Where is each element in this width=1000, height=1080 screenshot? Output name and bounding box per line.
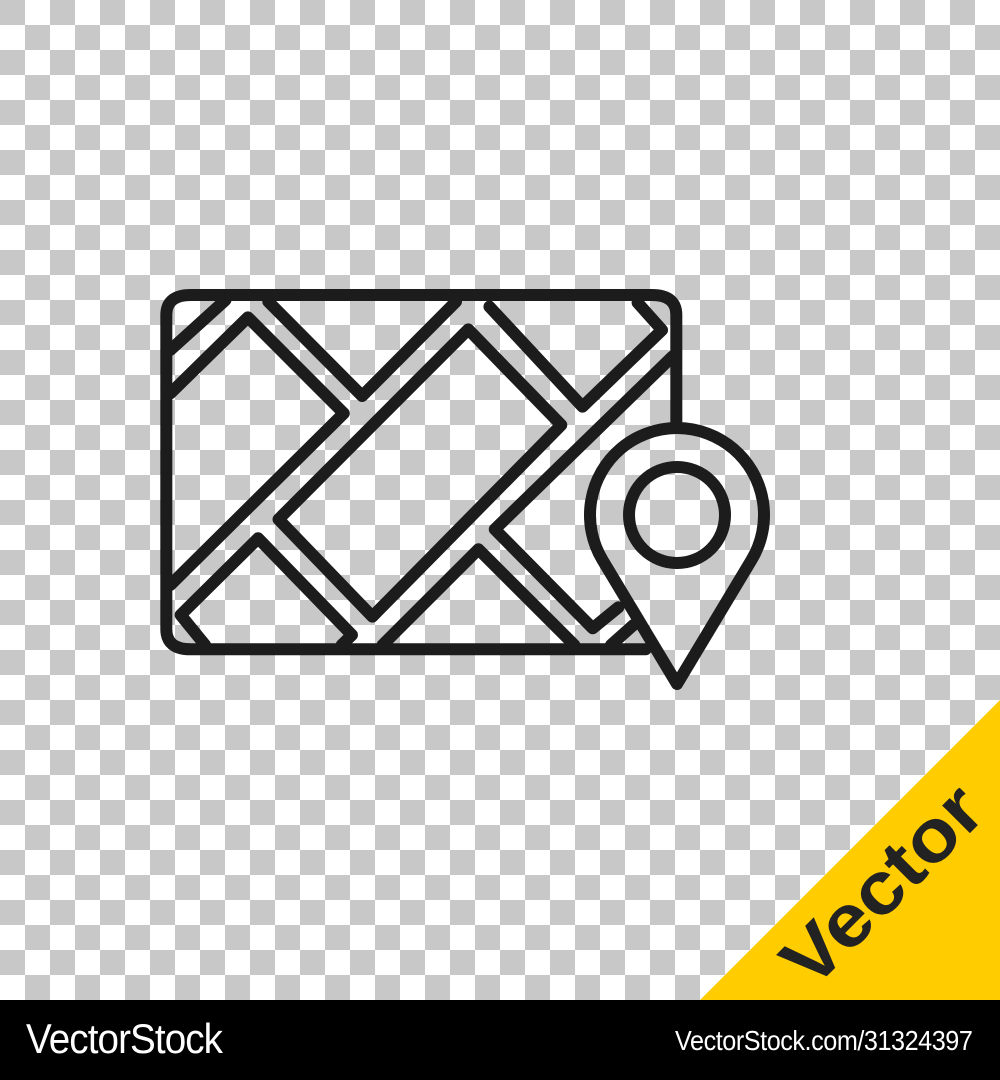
footer logo text: VectorStock — [26, 1015, 222, 1062]
map grid — [166, 295, 676, 649]
footer bar — [0, 1000, 1000, 1080]
icon: folded map with location pin — [166, 295, 764, 684]
footer url: VectorStock.com/31324397 — [675, 1025, 972, 1056]
badge: yellow Vector corner: Vector — [764, 767, 1000, 1003]
location pin — [590, 428, 764, 684]
